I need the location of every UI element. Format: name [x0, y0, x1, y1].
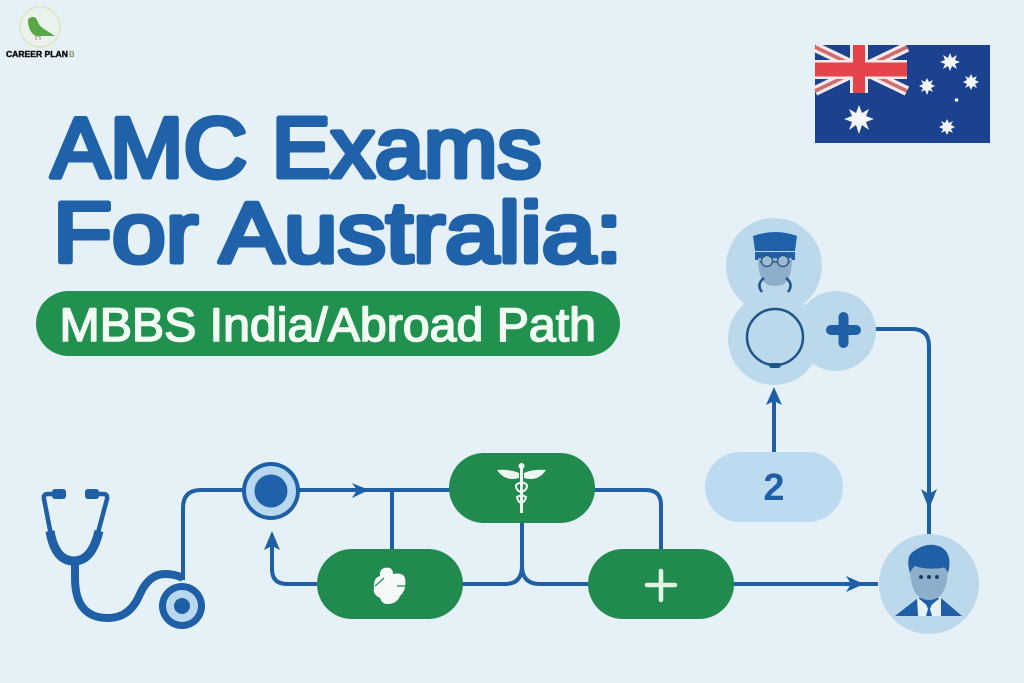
- title: [51, 101, 622, 281]
- logo: Career Plan B: CAREER PLAN: [6, 50, 68, 59]
- icon: ring: [747, 309, 803, 365]
- flag: stars: [844, 53, 979, 135]
- title: For Australia:: [53, 186, 622, 281]
- logo: Career Plan B: [6, 7, 75, 59]
- title: AMC Exams: [51, 101, 542, 196]
- pill: caduceus: [449, 453, 595, 523]
- icon: doctor: [753, 232, 797, 292]
- pill: anatomical heart: [317, 549, 463, 619]
- connector lines: [183, 329, 929, 584]
- arrows: [264, 387, 937, 592]
- icon: bold plus: [831, 317, 856, 343]
- flag: Australia: [815, 45, 990, 143]
- pill: plus: [588, 549, 734, 619]
- icon: stethoscope: [44, 489, 205, 629]
- icon: caduceus: [497, 463, 546, 513]
- pill: step 2: 2: [763, 467, 785, 509]
- cluster: doctor, circle and plus: [726, 218, 876, 385]
- flag: Union Jack canton: [815, 45, 907, 93]
- icon: graduate doctor avatar: [879, 534, 979, 634]
- subtitle pill: MBBS India/Abroad Path: [60, 300, 596, 352]
- logo: Career Plan B: B: [69, 50, 75, 59]
- pill: step 2: [705, 452, 843, 522]
- node: start circle: [242, 462, 300, 520]
- icon: plus: [647, 571, 675, 600]
- icon: heart: [374, 568, 406, 604]
